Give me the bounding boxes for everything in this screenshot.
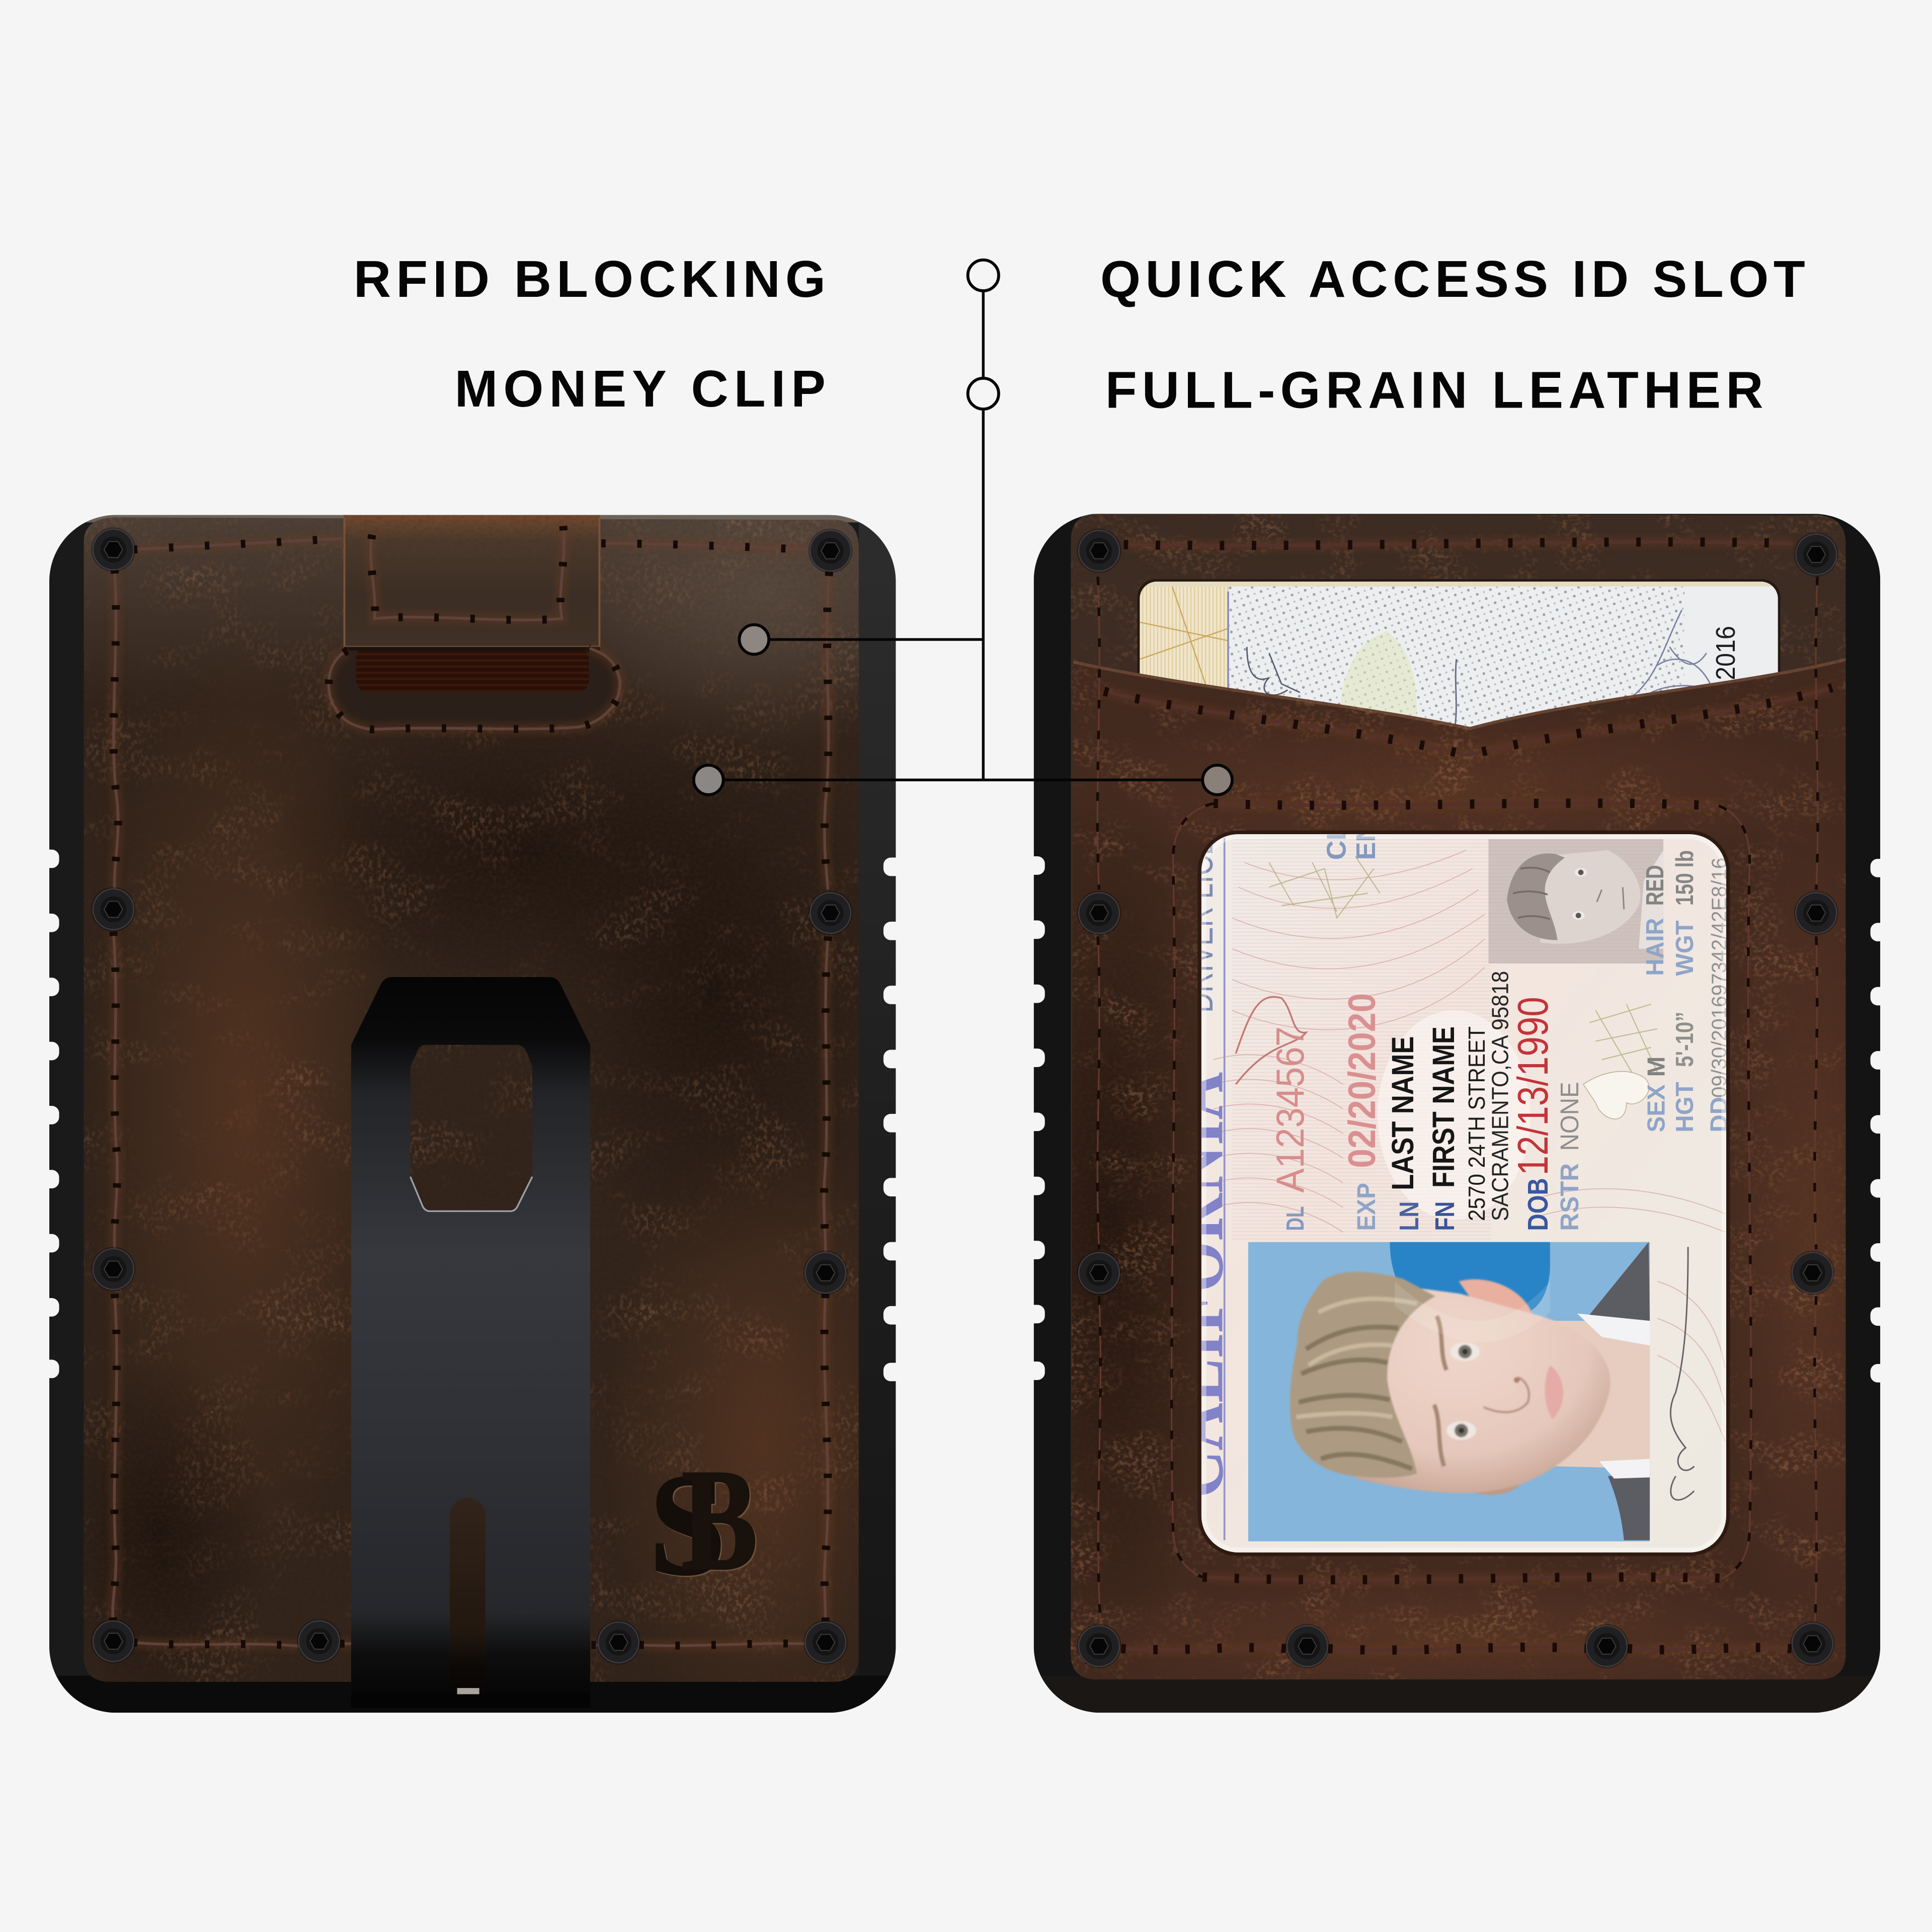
screws [1077,529,1838,1668]
license text: fields: WGT [1671,920,1699,976]
leather rear layer [1071,514,1846,1679]
driver photo [1248,1242,1650,1542]
marker: full-grain leather [1202,765,1232,795]
card text: fragment 0: 0 [1549,726,1576,739]
license text: fields: EXP [1351,1183,1381,1231]
license text: fields: NONE [1555,1082,1584,1151]
window glare [1201,834,1726,1553]
license text: fields: 09/30/201697342/42E8/16 [1707,857,1731,1098]
license text: fields: LAST NAME [1386,1036,1420,1190]
license text: fields: FN [1430,1201,1460,1231]
license text: state and heading: CL [1321,824,1351,860]
driver license behind clear window [1154,779,1733,1553]
leather front pocket [998,653,1910,1713]
license text: fields: DD [1706,1097,1733,1133]
card text: year: 2016 [1711,626,1741,680]
license text: fields: A1234567 [1268,1026,1312,1193]
license text: fields: FIRST NAME [1426,1026,1461,1188]
license text: fields: LN [1394,1201,1424,1231]
legend node: top [968,260,999,291]
logo: SB emboss: B [681,1439,758,1600]
license text: state and heading [1154,779,1381,1540]
license text: fields: HGT [1671,1082,1699,1133]
label: RFID blocking: RFID BLOCKING [354,250,826,308]
stitching [113,525,829,1646]
marker: money clip [694,765,723,795]
card text: fragment M: M [1639,706,1666,727]
ID window lip [1197,831,1730,1556]
label: quick access ID slot: QUICK ACCESS ID SLOT [1100,250,1805,308]
marker: RFID blocking [739,625,769,654]
money clip [351,977,590,1708]
license text: state and heading: EN [1351,823,1381,860]
ID card in quick access slot [1140,582,1778,791]
legend node: second [968,378,999,409]
leather back panel [84,517,859,1682]
pull tab [344,515,600,651]
security linework [1214,834,1725,1441]
license text: fields: HAIR [1642,918,1669,976]
label: full-grain leather: FULL-GRAIN LEATHER [1105,361,1763,419]
logo: SB emboss: S [650,1443,726,1605]
signature [1670,1247,1694,1500]
license text: fields: SEX [1643,1084,1670,1133]
metal frame with grip notches [1023,514,1893,1713]
license text: fields: SACRAMENTO,CA 95818 [1487,971,1513,1221]
license text: fields: RED [1642,865,1669,906]
license text: fields [1268,850,1733,1231]
license text: state and heading: DRIVER LICENSE [1179,779,1221,1013]
panel: front of wallet (right) [998,514,1910,1713]
screws [91,527,853,1665]
leader lines [694,260,1232,795]
label: money clip: MONEY CLIP [455,360,826,418]
metal frame with grip notches [37,515,906,1713]
license text: fields: 2570 24TH STREET [1464,1026,1490,1221]
license ghost photo [1488,839,1663,963]
license text: fields: RSTR [1555,1163,1584,1231]
license text: state and heading: CALIFORNIA [1154,1072,1239,1498]
stitching [1097,542,1832,1650]
license text: fields: 150 lb [1671,850,1699,906]
license text: fields: DL [1282,1206,1309,1231]
license text: fields: DOB [1522,1178,1554,1231]
elastic slot [331,646,617,727]
license text: fields: 02/20/2020 [1341,993,1384,1168]
license text: fields: 5'-10” [1671,1012,1699,1067]
panel: back of wallet (left) [37,431,974,1762]
license text: fields: M [1643,1057,1670,1077]
license text: fields: 12/13/1990 [1509,997,1557,1175]
